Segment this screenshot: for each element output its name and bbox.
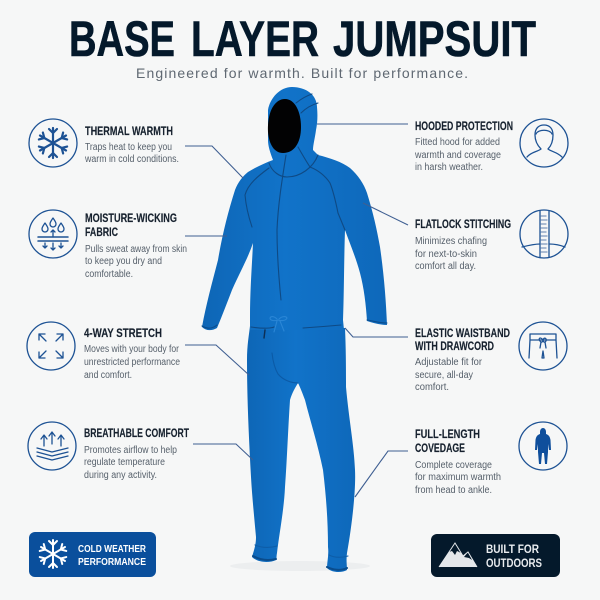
description: Minimizes chafing [415,236,487,247]
icon: body silhouette [535,428,551,464]
title [69,11,536,67]
icon: droplets over fabric [38,218,68,250]
description: warm in cold conditions. [84,154,179,165]
feature: flatlock stitching [415,210,568,272]
description [415,357,483,393]
icon: four diagonal arrows [39,334,63,358]
badge text [78,543,146,568]
heading: FLATLOCK STITCHING [415,219,511,231]
seams [202,94,387,570]
badge text: OUTDOORS [486,558,542,570]
jumpsuit figure [202,87,387,572]
title: JUMPSUIT [333,11,536,67]
title: LAYER [191,11,319,67]
heading: BREATHABLE COMFORT [84,428,189,440]
description [415,236,487,272]
feature: moisture-wicking fabric [29,210,187,280]
heading: FULL-LENGTH [415,429,480,441]
description [84,142,179,165]
heading: FABRIC [85,227,118,239]
heading [85,213,177,239]
feature: elastic waistband [415,322,567,393]
feature: hooded protection [414,119,568,173]
description: unrestricted performance [84,357,180,368]
icon: arrows rising from waves [37,432,68,460]
description: and comfort. [84,370,132,381]
description: secure, all-day [415,370,473,381]
feature: full-length coverage [415,422,567,496]
face opening [268,99,301,153]
badge: cold weather performance [29,532,156,577]
left leg and pants [247,326,355,572]
feature: 4-way stretch [27,322,180,381]
title: BASE [69,11,175,67]
icon: white snowflake [40,540,66,568]
torso, arms and hood [202,87,387,330]
badge text: PERFORMANCE [78,556,146,568]
icon: snowflake [39,128,67,158]
description: comfort all day. [415,261,476,272]
badge text: COLD WEATHER [78,543,146,555]
description [84,344,180,381]
description: Traps heat to keep you [85,142,172,153]
badge text: BUILT FOR [486,544,540,556]
description: comfortable. [85,269,133,280]
description: during any activity. [84,470,157,481]
badge text [486,544,542,570]
description [84,445,177,481]
description: Pulls sweat away from skin [85,244,187,255]
heading: ELASTIC WAISTBAND [415,328,510,340]
heading: 4-WAY STRETCH [84,328,162,340]
feature: thermal warmth [29,119,179,167]
description: Adjustable fit for [415,357,483,368]
description: Moves with your body for [84,344,180,355]
description: for next-to-skin [415,249,477,260]
description: warmth and coverage [414,150,501,161]
icon: waistband with drawcord [529,334,557,358]
description: Complete coverage [415,460,492,471]
badge: built for outdoors [431,534,560,577]
icon: hooded head [527,125,562,157]
feature: breathable comfort [28,422,189,481]
heading: THERMAL WARMTH [85,126,173,138]
description: from head to ankle. [415,485,492,496]
description: for maximum warmth [415,472,501,483]
description: Promotes airflow to help [84,445,177,456]
subtitle: Engineered for warmth. Built for performance. [136,65,468,81]
description: regulate temperature [84,457,165,468]
icon: stitched seam [522,211,565,257]
heading: COVEDAGE [415,443,465,455]
heading [415,429,480,455]
heading: MOISTURE-WICKING [85,213,177,225]
description [415,460,501,496]
description [85,244,187,280]
description: comfort. [415,382,449,393]
leader lines [185,124,408,497]
heading: HOODED PROTECTION [415,121,513,133]
heading: WITH DRAWCORD [415,341,494,353]
icon: mountains [439,543,477,567]
description [414,137,501,173]
heading [415,328,510,353]
description: in harsh weather. [415,162,483,173]
description: Fitted hood for added [415,137,500,148]
description: to keep you dry and [85,256,162,267]
